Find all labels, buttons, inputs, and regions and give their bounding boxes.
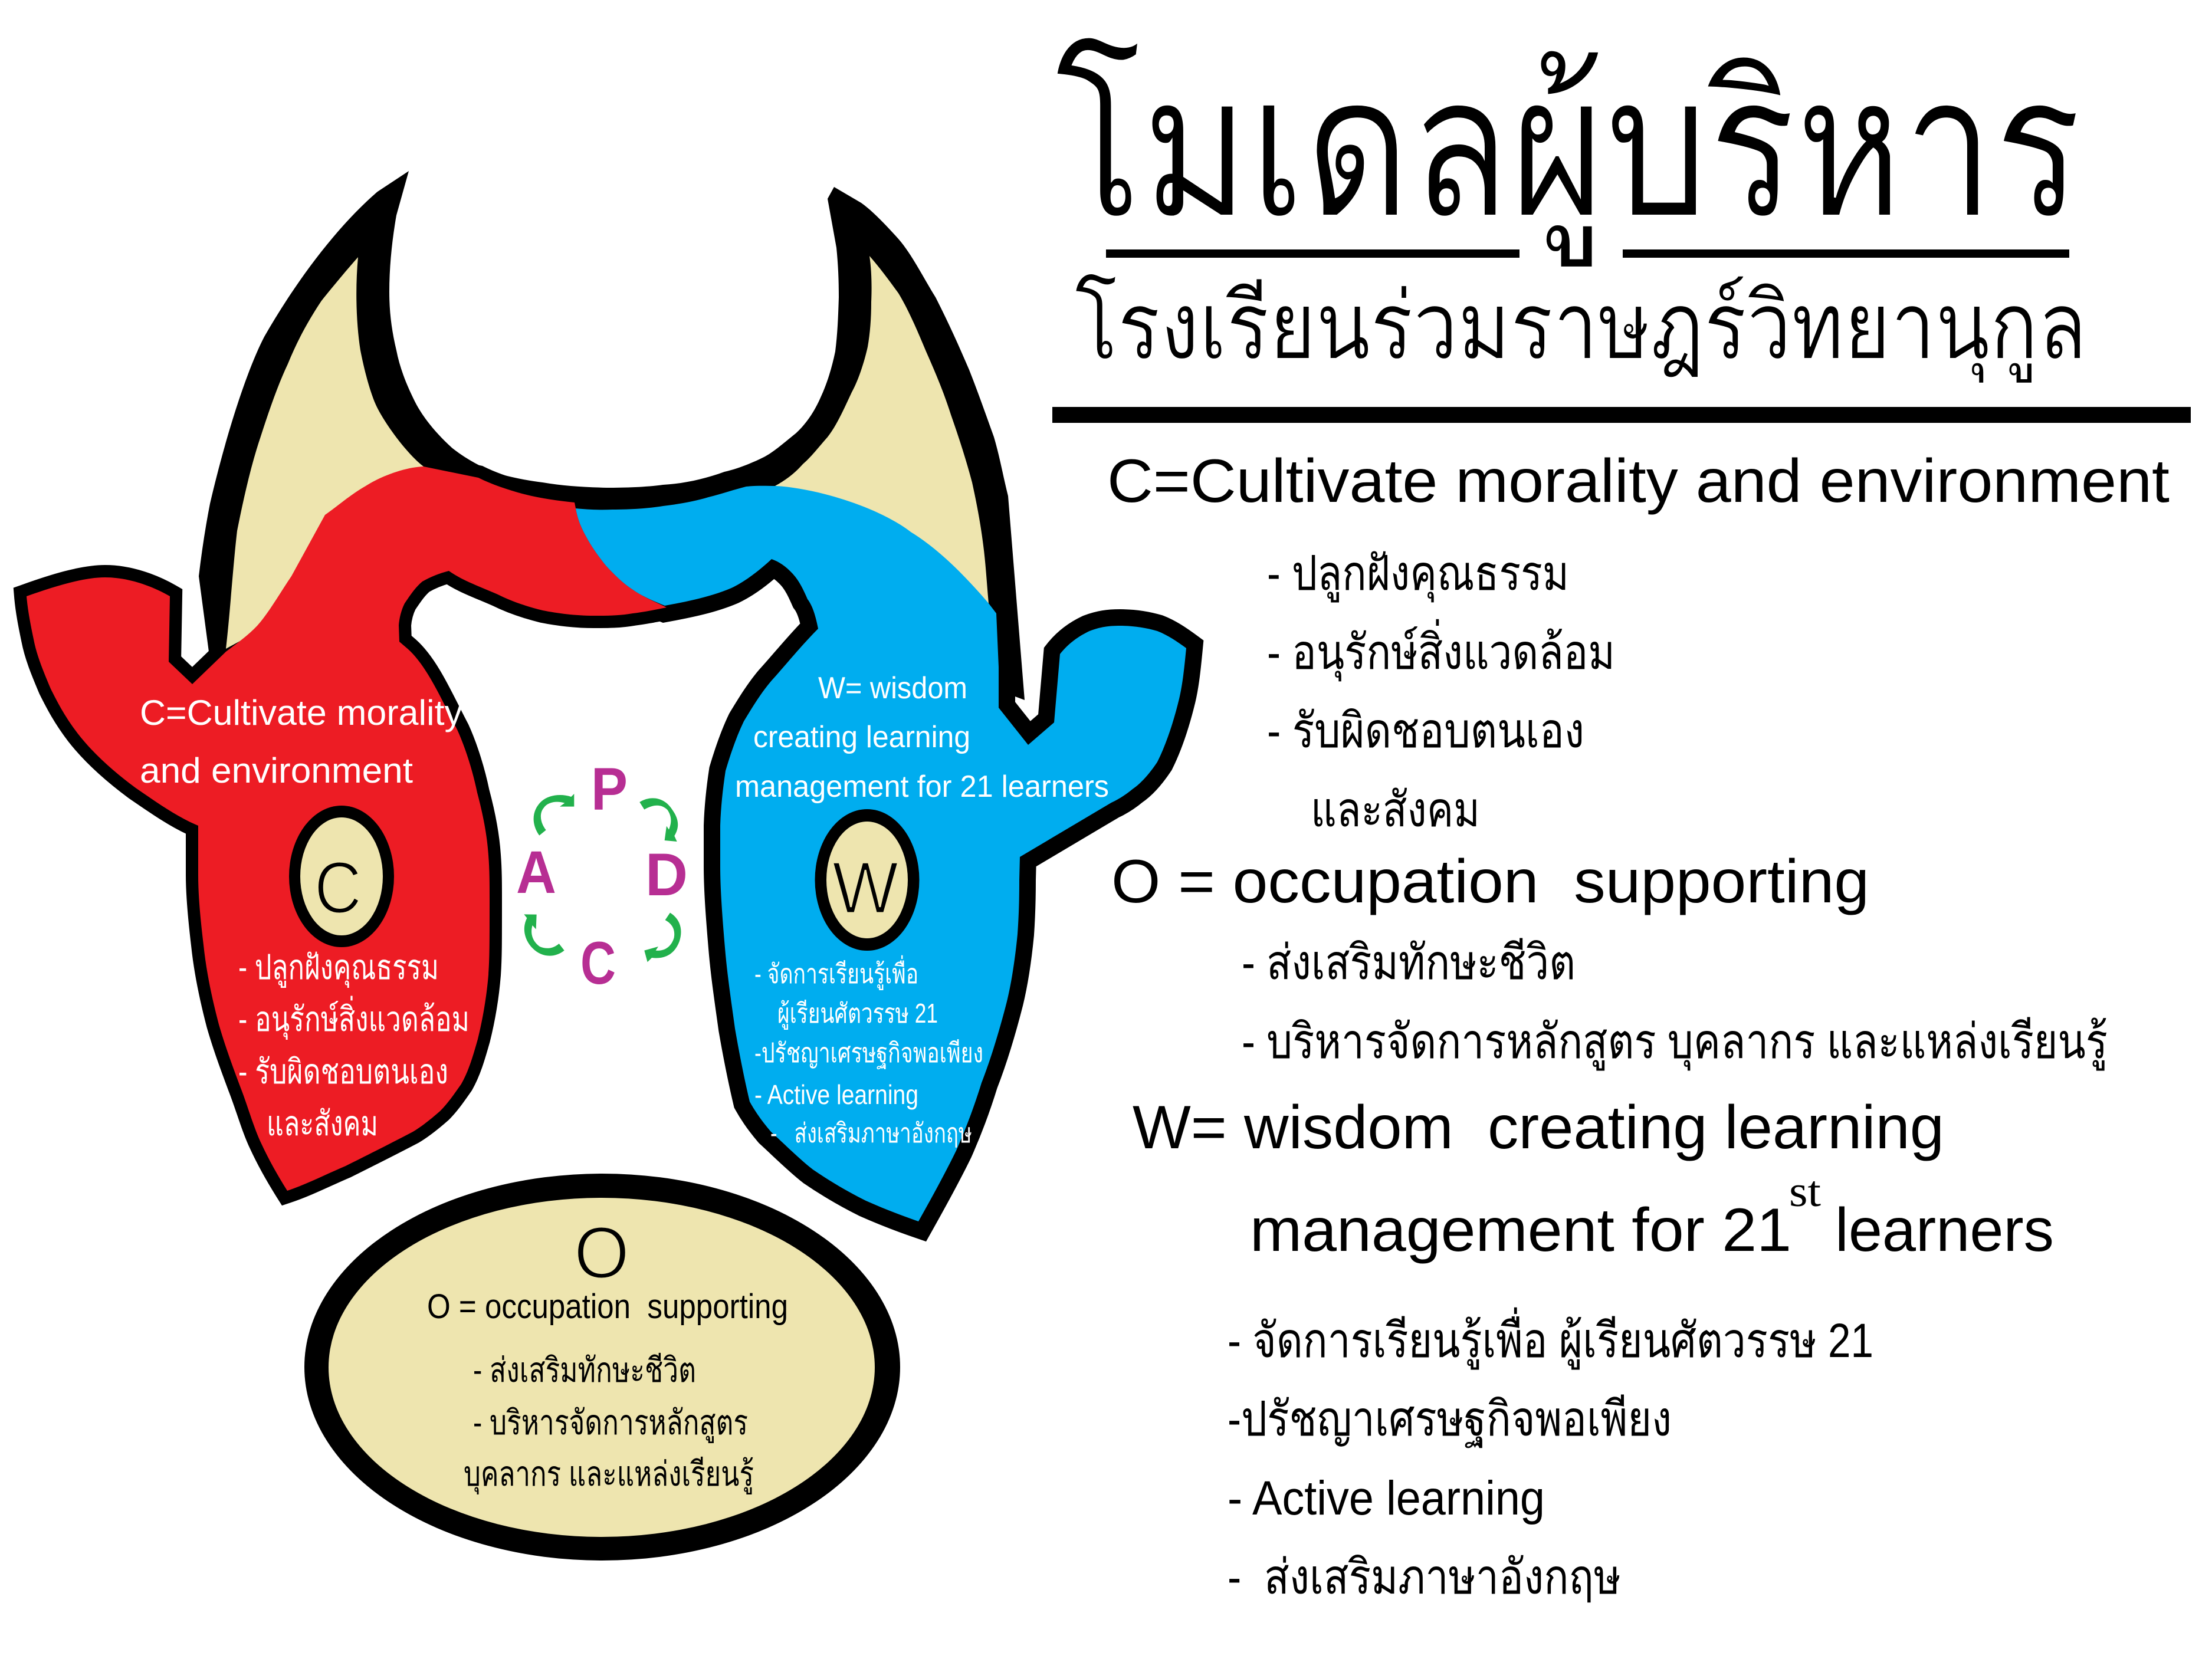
title underline left — [1106, 249, 1519, 258]
O oval panel: O — [574, 1213, 629, 1294]
blue segment heading: management for 21 learners — [735, 770, 1109, 804]
section W text: - Active learning — [1228, 1471, 1545, 1525]
blue segment list: - จัดการเรียนรู้เพื่อ — [754, 955, 918, 990]
blue segment list — [754, 955, 983, 1148]
C badge — [289, 806, 394, 947]
bull head diagram — [27, 171, 1186, 1221]
blue segment heading: creating learning — [753, 720, 970, 754]
section O text: O = occupation supporting — [1111, 847, 1869, 916]
O panel list: - บริหารจัดการหลักสูตร — [473, 1404, 748, 1443]
O oval panel — [304, 1174, 900, 1561]
blue segment heading — [735, 671, 1109, 804]
red segment heading: C=Cultivate morality — [140, 693, 462, 732]
section W text: learners — [1835, 1196, 2054, 1264]
section O text: - ส่งเสริมทักษะชีวิต — [1242, 936, 1576, 990]
section W text: - จัดการเรียนรู้เพื่อ ผู้เรียนศัตวรรษ 21 — [1228, 1307, 1873, 1369]
section O text — [1111, 847, 2108, 1071]
O panel list — [464, 1351, 754, 1495]
section C text: C=Cultivate morality and environment — [1107, 447, 2170, 515]
PDCA letters: A — [516, 839, 556, 906]
PDCA letters: P — [591, 755, 628, 823]
blue segment: W — [576, 486, 1186, 1221]
red segment list: - รับผิดชอบตนเอง — [238, 1053, 448, 1091]
PDCA letters: D — [645, 841, 688, 908]
red segment outline — [27, 467, 667, 1191]
section W text: -ปรัชญาเศรษฐกิจพอเพียง — [1228, 1392, 1672, 1448]
blue segment list: ผู้เรียนศัตวรรษ 21 — [777, 998, 938, 1030]
section W text: st — [1789, 1168, 1821, 1216]
section W text: management for 21 — [1250, 1196, 1791, 1264]
PDCA arrows — [524, 794, 681, 962]
blue segment list: - ส่งเสริมภาษาอังกฤษ — [770, 1118, 972, 1148]
horns black silhouette — [199, 171, 1025, 704]
header rule — [1052, 407, 2191, 423]
red segment list: - ปลูกฝังคุณธรรม — [238, 948, 439, 988]
C badge: C — [314, 847, 362, 929]
section W text: - ส่งเสริมภาษาอังกฤษ — [1228, 1550, 1621, 1604]
blue segment list: - Active learning — [754, 1079, 918, 1110]
red segment list — [238, 948, 470, 1143]
section C text — [1107, 447, 2170, 837]
red segment list: - อนุรักษ์สิ่งแวดล้อม — [238, 996, 470, 1040]
section C text: - รับผิดชอบตนเอง — [1267, 704, 1584, 758]
left horn beige fill — [226, 257, 442, 649]
O panel list: - ส่งเสริมทักษะชีวิต — [473, 1351, 696, 1389]
red segment heading: and environment — [140, 751, 413, 790]
O panel heading: O = occupation supporting — [427, 1287, 788, 1326]
PDCA cycle — [516, 755, 688, 997]
red segment: C — [27, 467, 667, 1191]
section C text: และสังคม — [1311, 783, 1480, 837]
W badge: W — [832, 847, 898, 929]
blue segment outline — [576, 486, 1186, 1221]
O panel list: บุคลากร และแหล่งเรียนรู้ — [464, 1455, 754, 1495]
PDCA letters — [516, 755, 688, 997]
red segment list: และสังคม — [267, 1105, 378, 1143]
blue segment list: -ปรัชญาเศรษฐกิจพอเพียง — [754, 1037, 983, 1069]
right horn beige fill — [775, 256, 989, 603]
section W text — [1133, 1093, 2054, 1604]
blue segment heading: W= wisdom — [818, 671, 967, 705]
section C text: - อนุรักษ์สิ่งแวดล้อม — [1267, 619, 1615, 682]
section W text: W= wisdom creating learning — [1133, 1093, 1944, 1162]
W badge — [815, 809, 919, 951]
section C text: - ปลูกฝังคุณธรรม — [1267, 547, 1569, 603]
red segment heading — [140, 693, 462, 790]
title underline right — [1623, 249, 2069, 258]
PDCA letters: C — [580, 929, 616, 997]
